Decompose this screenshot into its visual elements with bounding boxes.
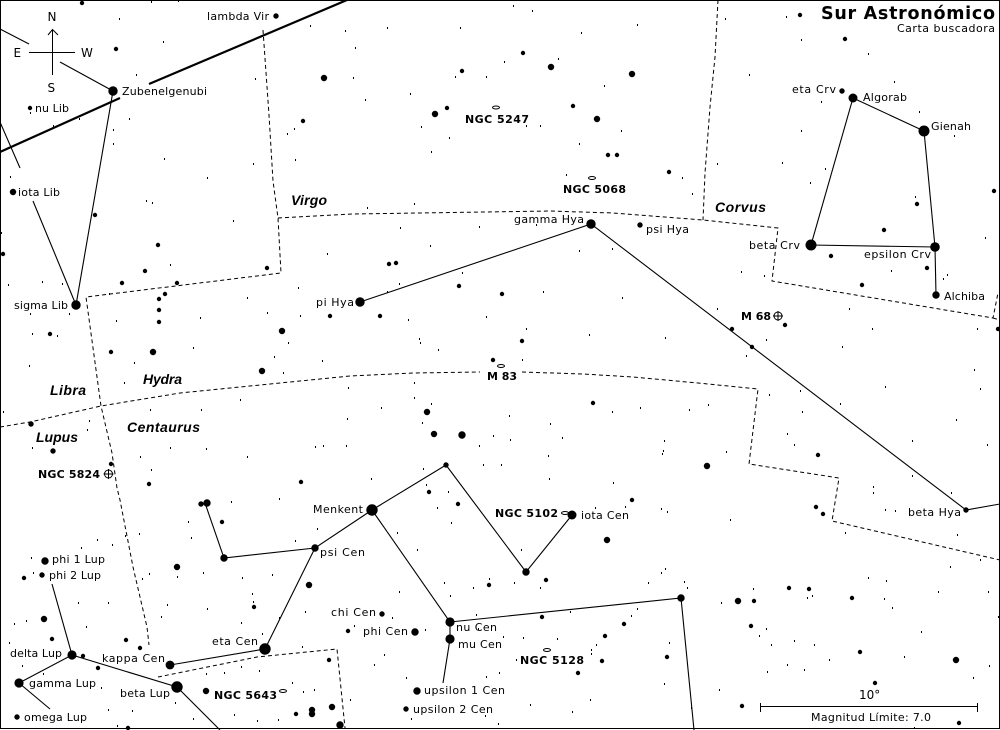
compass: N bbox=[48, 10, 56, 24]
star labels: delta Lup bbox=[10, 647, 62, 660]
galaxy: NGC 5068 bbox=[588, 176, 596, 180]
star labels: chi Cen bbox=[331, 606, 376, 619]
star labels: nu Cen bbox=[456, 621, 497, 634]
constellation names: Virgo bbox=[291, 192, 327, 208]
star labels: Menkent bbox=[313, 503, 364, 516]
star labels: Zubenelgenubi bbox=[122, 85, 207, 98]
star labels: iota Lib bbox=[18, 186, 60, 199]
deep-sky labels: NGC 5824 bbox=[38, 468, 100, 481]
cluster: NGC 5824 bbox=[104, 469, 114, 479]
constellation names: Corvus bbox=[715, 199, 766, 215]
compass bbox=[14, 10, 93, 95]
star labels: lambda Vir bbox=[207, 10, 269, 23]
lines: Lupus bbox=[19, 584, 220, 730]
scale bar bbox=[760, 688, 978, 724]
deep-sky labels: NGC 5247 bbox=[465, 113, 529, 126]
deep-sky labels: NGC 5643 bbox=[214, 689, 277, 702]
star labels: nu Lib bbox=[35, 102, 69, 115]
lines: Centaurus bbox=[170, 465, 694, 730]
star labels: eta Crv bbox=[792, 83, 836, 96]
star labels: mu Cen bbox=[458, 638, 502, 651]
lines: Corvus bbox=[811, 98, 936, 295]
star labels: omega Lup bbox=[24, 711, 87, 724]
star labels: Alchiba bbox=[944, 290, 985, 303]
cluster: M 68 bbox=[773, 311, 783, 321]
star labels: pi Hya bbox=[316, 296, 354, 309]
deep-sky labels bbox=[38, 113, 771, 702]
named stars bbox=[14, 86, 940, 693]
deep-sky labels: NGC 5102 bbox=[495, 507, 558, 520]
star labels: upsilon 2 Cen bbox=[413, 703, 493, 716]
galaxy: NGC 5247 bbox=[492, 106, 500, 109]
constellation names bbox=[36, 192, 766, 445]
star labels: beta Hya bbox=[908, 506, 961, 519]
star labels: upsilon 1 Cen bbox=[424, 684, 505, 697]
compass: E bbox=[14, 46, 21, 60]
star labels: psi Cen bbox=[320, 546, 365, 559]
star labels: eta Cen bbox=[212, 635, 258, 648]
subtitle: Carta buscadora bbox=[897, 22, 995, 35]
star labels: beta Crv bbox=[749, 239, 800, 252]
title: Sur Astronómico bbox=[821, 4, 995, 24]
lines: Hydra bbox=[360, 224, 1000, 510]
star labels: gamma Lup bbox=[29, 677, 96, 690]
star labels: phi 1 Lup bbox=[52, 553, 105, 566]
constellation names: Lupus bbox=[36, 429, 78, 445]
galaxy: NGC 5128 bbox=[544, 648, 550, 652]
deep-sky labels: NGC 5068 bbox=[563, 183, 626, 196]
deep-sky labels: M 83 bbox=[487, 370, 517, 383]
deep-sky labels: M 68 bbox=[741, 310, 771, 323]
galaxy: NGC 5102 bbox=[562, 512, 568, 514]
galaxy: M 83 bbox=[498, 364, 504, 368]
star labels: phi Cen bbox=[363, 625, 408, 638]
star labels: gamma Hya bbox=[514, 213, 584, 226]
deep-sky labels: NGC 5128 bbox=[520, 654, 584, 667]
scale bar: 10° bbox=[859, 688, 880, 702]
star labels: phi 2 Lup bbox=[49, 569, 101, 582]
star labels: iota Cen bbox=[581, 509, 629, 522]
compass: W bbox=[81, 46, 93, 60]
star labels: sigma Lib bbox=[14, 299, 68, 312]
deep-sky objects bbox=[104, 106, 783, 692]
star labels: psi Hya bbox=[646, 223, 689, 236]
constellation names: Hydra bbox=[143, 371, 182, 387]
limiting magnitude: Magnitud Límite: 7.0 bbox=[811, 711, 931, 724]
lines: Libra bbox=[0, 29, 113, 305]
constellation names: Centaurus bbox=[127, 419, 200, 435]
constellation names: Libra bbox=[50, 382, 86, 398]
star labels: kappa Cen bbox=[102, 652, 165, 665]
ecliptic line bbox=[0, 0, 347, 152]
compass: S bbox=[48, 81, 55, 95]
galaxy: NGC 5643 bbox=[280, 690, 286, 692]
star labels: Gienah bbox=[931, 120, 971, 133]
star labels: epsilon Crv bbox=[864, 248, 931, 261]
star labels: beta Lup bbox=[120, 687, 170, 700]
star labels: Algorab bbox=[863, 91, 907, 104]
